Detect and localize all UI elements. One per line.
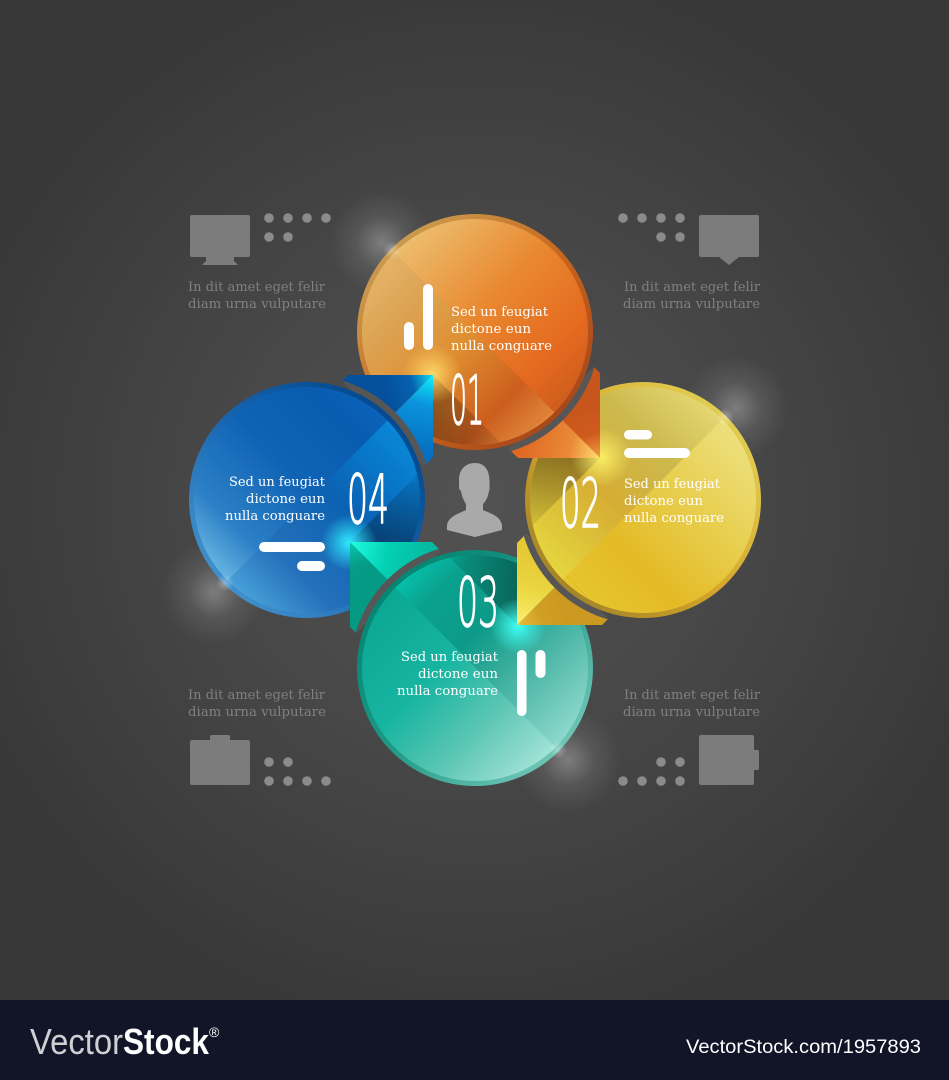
text: circle 04: [225, 475, 326, 524]
text: circle 03: Sed un feugiat: [401, 650, 499, 665]
content: circle 02: [560, 430, 724, 544]
corner: top right: [618, 213, 761, 312]
caption: [188, 280, 326, 312]
icon: bars 03: [517, 650, 546, 716]
circle 01 orange: [357, 214, 593, 450]
icon: case: [190, 735, 250, 785]
logo: Vector: [30, 1021, 123, 1062]
logo: Stock: [123, 1021, 210, 1062]
text: circle 01: Sed un feugiat: [451, 305, 549, 320]
content: circle 03: 03: [457, 564, 499, 643]
caption: In dit amet eget felir: [188, 280, 326, 295]
dots: [618, 757, 685, 786]
caption: In dit amet eget felir: [188, 688, 326, 703]
text: circle 03: [397, 650, 499, 699]
icon: battery: [699, 735, 759, 785]
icon: person: [447, 463, 502, 537]
text: circle 03: dictone eun: [418, 667, 499, 682]
caption: diam urna vulputare: [188, 297, 326, 312]
caption: [623, 688, 761, 720]
caption: [188, 688, 326, 720]
dots: [618, 213, 685, 242]
icon: bars 01: [404, 284, 433, 350]
text: circle 01: dictone eun: [451, 322, 532, 337]
text: circle 04: Sed un feugiat: [229, 475, 326, 490]
caption: [623, 280, 761, 312]
icon: monitor: [190, 215, 250, 265]
arrow tab: orange: [509, 367, 600, 458]
light halos behind circles: [162, 191, 788, 812]
text: circle 04: nulla conguare: [225, 509, 325, 524]
arrow tab: blue: [342, 375, 433, 466]
text: circle 02: [624, 477, 724, 526]
circle 02 yellow: [525, 382, 761, 618]
content: circle 02: 02: [560, 465, 601, 544]
content: circle 01: [404, 284, 552, 441]
circle 04 blue: [189, 382, 425, 618]
arrow tab: yellow: [517, 534, 608, 625]
source url: VectorStock.com/1957893: [686, 1037, 921, 1058]
content: circle 04: [225, 461, 389, 571]
corner: top left: [188, 213, 331, 312]
corner: bottom left: [188, 688, 331, 786]
caption: diam urna vulputare: [188, 705, 326, 720]
circle 03 teal: [357, 550, 593, 786]
arrow tab: teal: [350, 542, 441, 633]
icon: bars 02: [624, 430, 690, 458]
content: circle 03: [397, 564, 546, 716]
caption: diam urna vulputare: [623, 297, 760, 312]
text: circle 04: dictone eun: [246, 492, 326, 507]
content: circle 01: 01: [450, 362, 484, 441]
text: 04: [347, 461, 389, 540]
text: circle 02: nulla conguare: [624, 511, 724, 526]
icon: speech bubble: [699, 215, 759, 265]
dots: [264, 757, 331, 786]
footer bar: [0, 1000, 949, 1080]
text: circle 02: dictone eun: [624, 494, 704, 509]
text: circle 02: Sed un feugiat: [624, 477, 721, 492]
logo: ®: [209, 1024, 220, 1040]
caption: In dit amet eget felir: [624, 688, 761, 703]
text: circle 03: nulla conguare: [397, 684, 498, 699]
dots: [264, 213, 331, 242]
caption: diam urna vulputare: [623, 705, 760, 720]
caption: In dit amet eget felir: [624, 280, 761, 295]
corner: bottom right: [618, 688, 761, 786]
text: circle 01: [451, 305, 552, 354]
logo: [30, 1021, 220, 1062]
text: circle 01: nulla conguare: [451, 339, 552, 354]
icon: bars 04: [259, 542, 325, 571]
